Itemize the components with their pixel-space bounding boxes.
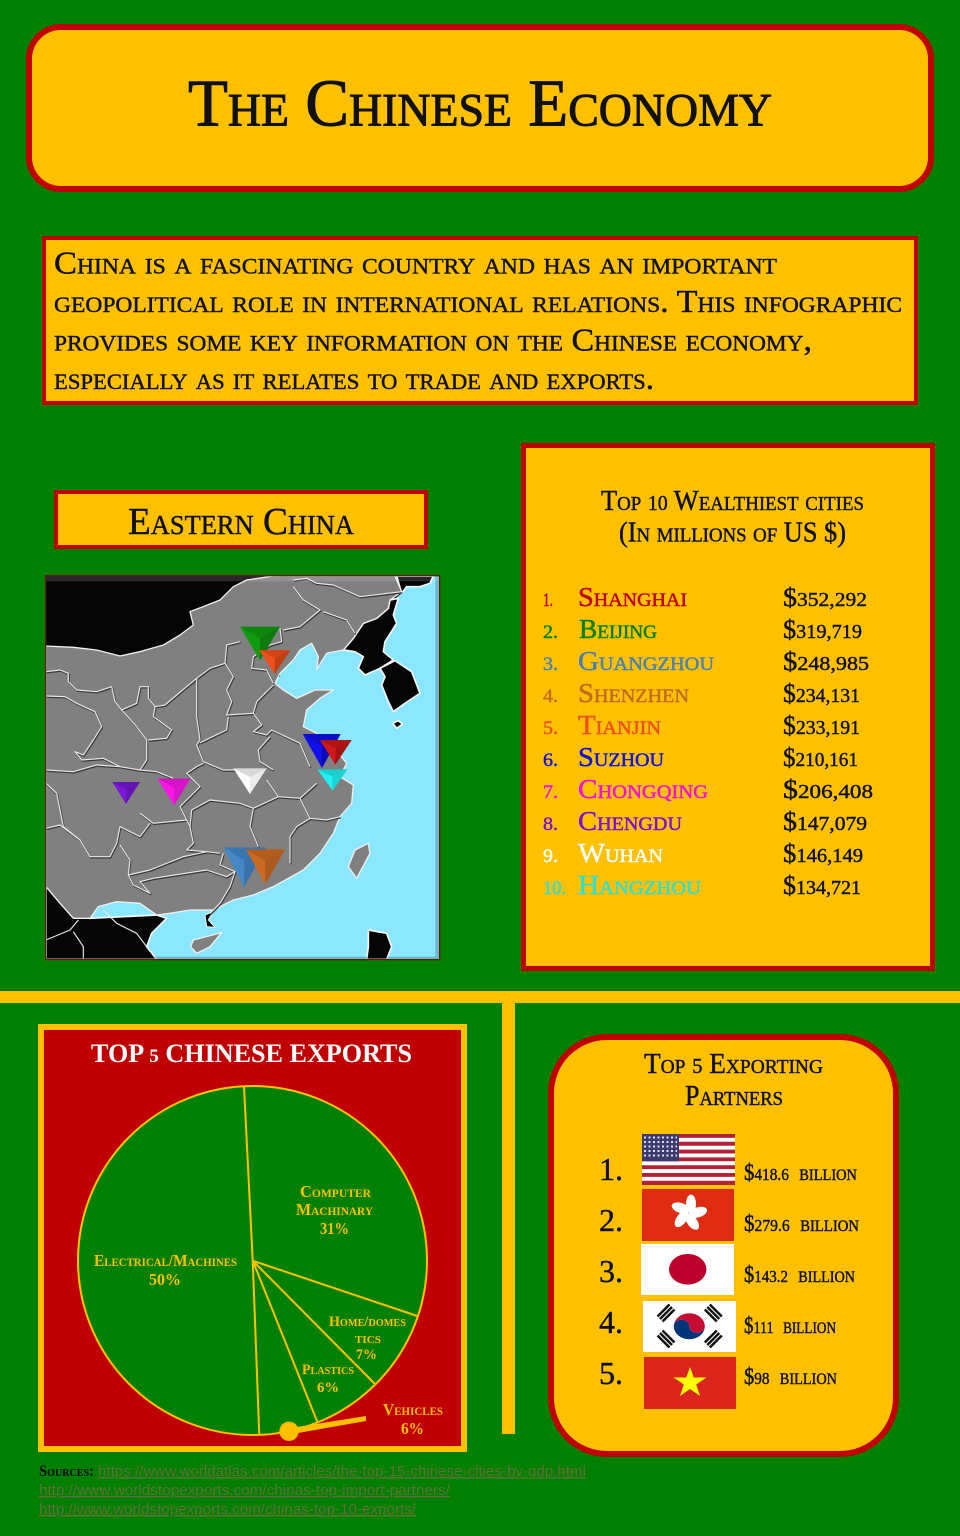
label: computer machinary: Computer [300, 1182, 371, 1201]
rank numbers: 2. [599, 1202, 623, 1238]
intro text box: geopolitical role in international relations. This infographic [54, 283, 902, 319]
label: computer machinary: Machinary [296, 1200, 373, 1219]
map of eastern China with city markers [45, 575, 440, 960]
intro text box: China is a fascinating country and has an important [54, 244, 778, 280]
rank numbers: 5. [599, 1355, 623, 1391]
city list [543, 582, 714, 900]
sources: http://www.worldstopexports.com/chinas-top-import-partners/ [39, 1483, 451, 1499]
flag: Hong Kong [642, 1189, 734, 1241]
marker: Tianjin [259, 650, 291, 674]
city list: 6. [543, 750, 558, 771]
city list: 1. [543, 590, 553, 611]
neighbouring countries [46, 576, 433, 959]
rank numbers: 3. [599, 1253, 623, 1289]
city values: $233,191 [783, 711, 860, 740]
city list: 9. [543, 846, 558, 867]
city values: $134,721 [783, 871, 861, 900]
city list: Chengdu [578, 806, 682, 836]
province borders [47, 579, 402, 914]
marker: Shenzhen [246, 849, 285, 885]
city values: $147,079 [783, 807, 867, 836]
label: plastics: Plastics [302, 1362, 354, 1378]
sources: http://www.worldstopexports.com/chinas-top-10-exports/ [39, 1502, 417, 1518]
label: home/domestics [329, 1314, 406, 1363]
map heading: Eastern China [56, 492, 426, 547]
heading: top 10: Top 10 Wealthiest cities [601, 486, 864, 517]
marker: Guangzhou [223, 847, 266, 887]
label: home/domestics: tics [355, 1331, 381, 1347]
map bevel [46, 576, 439, 581]
label: electrical/machines: 50% [149, 1270, 181, 1289]
city list: 10. [543, 878, 566, 899]
city list: 5. [543, 718, 558, 739]
flag: United States [642, 1134, 735, 1185]
partner trade values: $111 billion [744, 1313, 836, 1338]
city values: $352,292 [783, 583, 867, 612]
label: electrical/machines [94, 1251, 237, 1289]
land: China [46, 576, 402, 918]
sources: https://www.worldatlas.com/articles/the-top-15-chinese-cities-by-gdp.html [98, 1464, 586, 1480]
rank numbers [599, 1151, 623, 1391]
panel: top 10 wealthiest cities [524, 446, 932, 968]
city list: 2. [543, 622, 558, 643]
label: home/domestics: 7% [356, 1347, 377, 1363]
city list: Beijing [579, 614, 657, 644]
rank numbers: 1. [599, 1151, 623, 1187]
label: plastics [302, 1362, 354, 1396]
flag: South Korea [643, 1301, 736, 1352]
city values: $206,408 [783, 775, 873, 804]
heading: top 10 [601, 486, 864, 548]
city list: Chongqing [578, 774, 708, 804]
heading: partners [644, 1049, 823, 1112]
marker: Beijing [240, 627, 280, 661]
flag: Japan [641, 1244, 734, 1295]
city list: 3. [543, 654, 558, 675]
city values: $234,131 [783, 679, 860, 708]
city values: $319,719 [783, 615, 862, 644]
city values: $146,149 [783, 839, 863, 868]
label: electrical/machines: Electrical/Machines [94, 1251, 237, 1270]
city list: Tianjin [578, 710, 661, 740]
city list: Guangzhou [578, 646, 714, 676]
callout: vehicles: Vehicles [383, 1400, 443, 1419]
partner trade values: $98 billion [744, 1364, 837, 1389]
heading: partners: Top 5 Exporting [644, 1049, 823, 1080]
label: computer machinary [296, 1182, 373, 1238]
marker: Hangzhou [317, 769, 347, 791]
marker: Wuhan [233, 768, 267, 794]
panel: top 5 exporting partners [551, 1037, 896, 1454]
city list: 4. [543, 686, 558, 707]
city list: Suzhou [578, 742, 664, 772]
callout: vehicles [279, 1400, 443, 1441]
sources: Sources: [39, 1463, 94, 1480]
pie chart [78, 1086, 443, 1441]
marker: Suzhou [303, 734, 341, 768]
heading: partners: Partners [685, 1081, 783, 1112]
marker: Shanghai [320, 740, 352, 765]
heading: top 10: (In millions of US $) [619, 518, 846, 548]
title: The Chinese Economy [188, 66, 772, 140]
city values: $248,985 [783, 647, 869, 676]
title banner [29, 27, 931, 189]
city list: 8. [543, 814, 558, 835]
city list: Shenzhen [578, 678, 689, 708]
map heading: Eastern China: Eastern China [128, 501, 354, 543]
label: computer machinary: 31% [320, 1219, 349, 1238]
heading: exports: TOP 5 CHINESE EXPORTS [91, 1039, 412, 1068]
partner trade values: $279.6 billion [744, 1211, 859, 1236]
city list: Shanghai [578, 582, 687, 612]
label: home/domestics: Home/domes [329, 1314, 406, 1330]
city list: 7. [543, 782, 558, 803]
panel: top 5 Chinese exports [41, 1027, 464, 1449]
flag: Vietnam [644, 1357, 736, 1409]
partner trade values: $143.2 billion [744, 1262, 855, 1287]
rank numbers: 4. [599, 1304, 623, 1340]
city list: Hangzhou [578, 870, 701, 900]
intro text box [44, 238, 916, 403]
city values [783, 583, 873, 900]
partner trade values: $418.6 billion [744, 1160, 857, 1185]
city list: Wuhan [578, 838, 663, 868]
marker: Chongqing [157, 779, 191, 805]
callout: vehicles: 6% [401, 1419, 424, 1438]
sources [39, 1463, 586, 1518]
intro text box: especially as it relates to trade and exports. [54, 360, 654, 396]
label: plastics: 6% [317, 1380, 339, 1396]
partner trade values [744, 1160, 859, 1389]
marker: Chengdu [112, 782, 140, 804]
city values: $210,161 [783, 743, 858, 772]
intro text box: provides some key information on the Chinese economy, [54, 322, 812, 358]
section dividers [0, 991, 960, 1434]
